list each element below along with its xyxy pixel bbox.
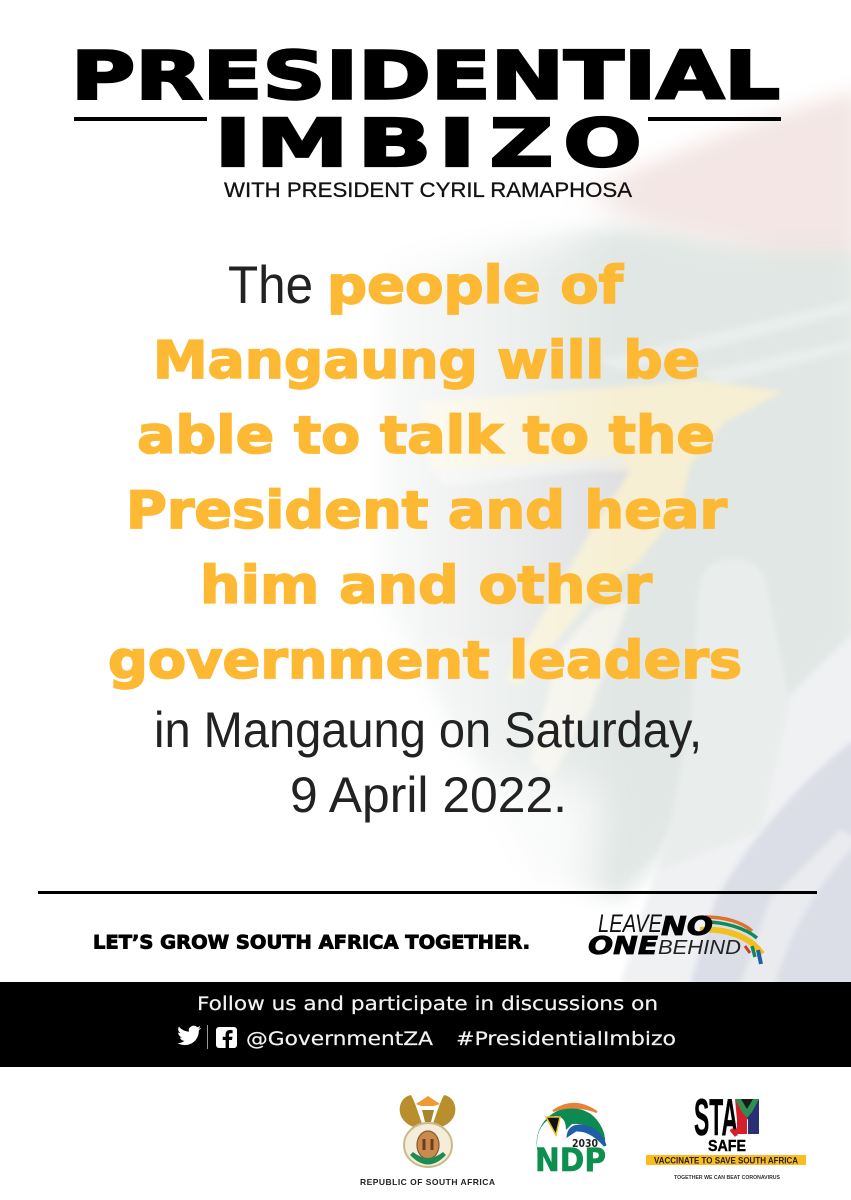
main message: people of — [327, 256, 624, 316]
logo: NDP 2030: NDP — [535, 1141, 606, 1179]
handle: @GovernmentZA — [246, 1028, 433, 1050]
logo: Stay Safe: TOGETHER WE CAN BEAT CORONAVIRUS — [674, 1175, 780, 1181]
main message: Mangaung will be — [153, 331, 700, 391]
left fade — [0, 150, 620, 990]
main message: him and other — [200, 556, 652, 616]
main message: President and hear — [126, 481, 727, 541]
main message: 9 April 2022. — [290, 767, 567, 823]
social band — [0, 982, 851, 1067]
main message: able to talk to the — [137, 406, 715, 466]
hashtag: #PresidentialImbizo — [456, 1028, 676, 1050]
logo: Leave No One Behind: NO — [661, 912, 713, 942]
title: Imbizo: I — [214, 105, 252, 182]
icon: facebook — [216, 1027, 237, 1048]
follow text: Follow us and participate in discussions on — [197, 994, 658, 1015]
logo: NDP 2030 — [535, 1104, 606, 1179]
logo: Stay Safe — [646, 1089, 806, 1181]
subtitle: WITH PRESIDENT CYRIL RAMAPHOSA — [224, 179, 632, 202]
logo: coat of arms — [400, 1095, 455, 1167]
main message — [108, 256, 742, 823]
icon: twitter — [177, 1026, 201, 1045]
title: Imbizo: Z — [490, 105, 554, 182]
logo: NDP 2030: 2030 — [572, 1137, 598, 1150]
logo: Stay Safe: SAFE — [708, 1138, 746, 1155]
title: Imbizo: O — [563, 105, 642, 182]
main message: The — [228, 256, 313, 315]
logo: Leave No One Behind: LEAVE — [598, 910, 662, 938]
title: Imbizo: I — [438, 105, 476, 182]
logo: Leave No One Behind: ONE — [588, 931, 658, 960]
title: Imbizo: M — [256, 105, 349, 182]
title rule right — [648, 117, 781, 121]
lower soft fade — [380, 760, 600, 990]
top soft fade — [200, 120, 620, 330]
divider rule — [38, 891, 817, 894]
main message: in Mangaung on Saturday, — [154, 702, 702, 758]
logo: Stay Safe: VACCINATE TO SAVE SOUTH AFRICA — [654, 1156, 798, 1166]
logo: Leave No One Behind — [588, 910, 762, 964]
title: Imbizo: B — [357, 105, 432, 182]
title rule left — [74, 117, 207, 121]
icon: separator — [207, 1025, 208, 1049]
main message: government leaders — [108, 631, 742, 691]
logo: Stay Safe: STA — [694, 1089, 738, 1147]
slogan: LET’S GROW SOUTH AFRICA TOGETHER. — [93, 932, 530, 954]
title: Imbizo — [214, 105, 642, 182]
label: republic of south africa: REPUBLIC OF SOUTH AFRICA — [360, 1177, 495, 1187]
title: Presidential: PRESIDENTIAL — [71, 38, 780, 114]
logo: Leave No One Behind: BEHIND — [658, 937, 741, 959]
